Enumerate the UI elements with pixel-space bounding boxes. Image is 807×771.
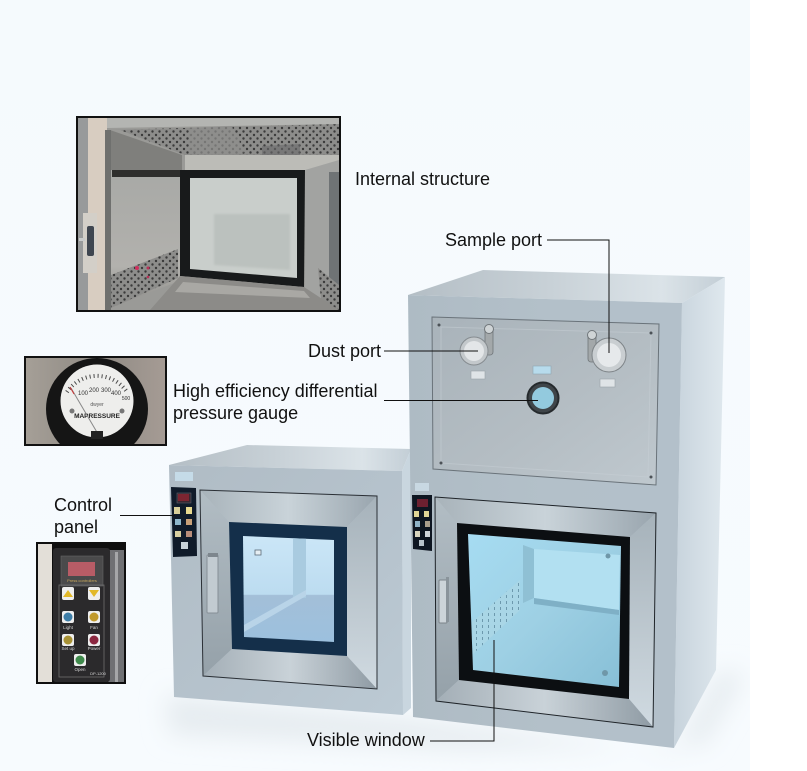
brand label [175, 472, 193, 481]
lower door bevels [435, 497, 656, 727]
button labels: Set up [61, 646, 75, 651]
inset photo: pressure gauge [24, 356, 167, 446]
port labels [471, 366, 615, 387]
perforated ceiling [120, 124, 339, 155]
left wall [111, 170, 180, 284]
callout: visible window [307, 640, 494, 750]
callout: pressure gauge: pressure gauge [173, 403, 298, 423]
callout: sample port: Sample port [445, 230, 542, 250]
door post [78, 118, 88, 310]
top rail [107, 118, 339, 128]
floor shadow [168, 678, 734, 750]
control panel on door [412, 495, 432, 551]
gauge dial: MAPRESSURE [74, 413, 121, 420]
chamber back wall [107, 124, 338, 310]
callout: dust port: Dust port [308, 341, 381, 361]
button labels: DP-1200 [90, 671, 107, 676]
cabinet front [169, 465, 403, 715]
door handle [439, 577, 449, 623]
callout: control panel [54, 495, 175, 537]
gauge dial: 400 [111, 391, 122, 397]
gauge dial: 500 [122, 396, 130, 402]
cabinet top [408, 270, 725, 303]
callout: sample port [445, 230, 609, 353]
callout: pressure gauge [173, 381, 538, 423]
window glass [190, 178, 297, 278]
label: internal structure: Internal structure [355, 169, 490, 189]
inset photo: internal structure [76, 116, 341, 312]
brand label [415, 483, 429, 491]
button labels: Power [88, 646, 101, 651]
tall pass box cabinet [408, 270, 725, 748]
callout: control panel: panel [54, 517, 98, 537]
differential pressure gauge [528, 382, 558, 414]
visible window [457, 523, 630, 699]
button labels: Open [74, 667, 86, 672]
panel body [53, 548, 110, 682]
button labels: Fan [90, 625, 98, 630]
gauge dial: dwyer [90, 402, 104, 408]
cabinet side [674, 277, 725, 748]
window [229, 522, 347, 656]
cabinet top [169, 445, 411, 471]
door frame with bevels [200, 490, 377, 689]
door handle [207, 553, 218, 613]
gauge dial: 200 [89, 388, 100, 394]
cabinet front [408, 295, 682, 748]
right wall [305, 160, 339, 310]
gauge dial [67, 376, 130, 439]
window frame [180, 170, 305, 287]
panel display: Press controllers [67, 578, 97, 583]
callout: visible window: Visible window [307, 730, 426, 750]
door latch [79, 213, 94, 273]
sample port clamp [588, 330, 626, 372]
gauge dial: 100 [78, 391, 89, 397]
red reflections [135, 266, 139, 270]
panel display [61, 556, 103, 586]
dust port clamp [460, 324, 494, 365]
small pass box cabinet [169, 445, 411, 715]
back wall top band [185, 155, 339, 170]
upper access plate [432, 317, 659, 485]
gauge dial: 300 [101, 388, 112, 394]
floor [150, 276, 339, 310]
control panel on door [171, 487, 197, 557]
callout: pressure gauge: High efficiency differential [173, 381, 377, 401]
inset photo: control panel [36, 542, 126, 684]
button labels: Light [63, 625, 74, 630]
panel buttons [59, 585, 104, 677]
callout: control panel: Control [54, 495, 112, 515]
cabinet side [402, 449, 411, 715]
button labels [61, 625, 107, 676]
left wall perforation [111, 249, 178, 308]
